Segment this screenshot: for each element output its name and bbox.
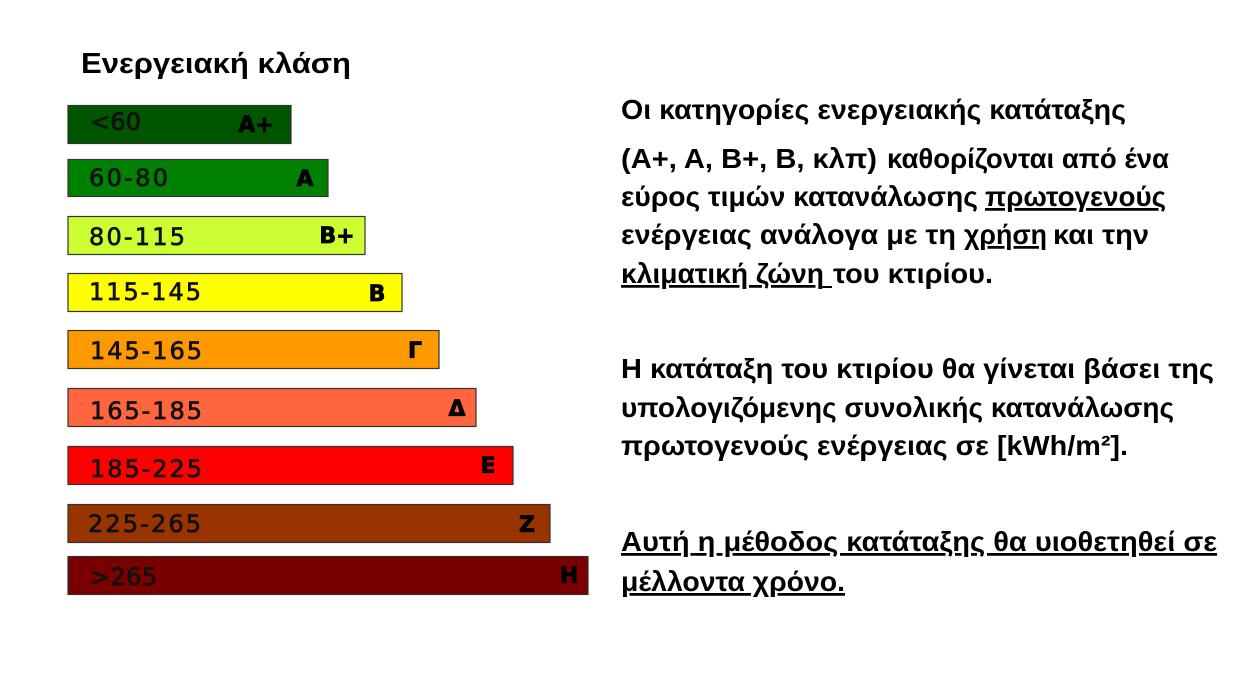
- bar: A: A: [296, 167, 314, 192]
- text block: classification categories: [621, 94, 1169, 289]
- text block: classification categories: καθορίζονται από ένα: [887, 143, 1169, 174]
- text block: classification categories: πρωτογενούς: [985, 181, 1166, 212]
- bar: B: B: [369, 282, 385, 307]
- text block: future adoption note: Αυτή η μέθοδος κατάταξης θα υιοθετηθεί σε: [621, 526, 1217, 557]
- text block: classification categories: χρήση: [964, 219, 1047, 250]
- bar: Η: [68, 556, 588, 594]
- bar: Η: >265: [90, 563, 157, 591]
- text block: classification categories: εύρος τιμών κατανάλωσης: [621, 181, 978, 212]
- bar: Ζ: [68, 504, 550, 542]
- bar: Η: Η: [560, 564, 578, 589]
- bar: A: 60-80: [89, 164, 168, 192]
- text block: building classification: πρωτογενούς ενέργειας σε [kWh/m²].: [621, 430, 1128, 461]
- bar: B+: 80-115: [89, 223, 185, 251]
- text block: classification categories: (Α+, Α, Β+, Β, κλπ): [621, 143, 877, 174]
- text block: classification categories: και την: [1053, 219, 1149, 250]
- bar: Δ: 165-185: [90, 397, 202, 425]
- bar: Δ: [68, 388, 476, 426]
- text block: building classification: Η κατάταξη του κτιρίου θα γίνεται βάσει της: [621, 353, 1214, 384]
- text block: future adoption note: μέλλοντα χρόνο.: [621, 566, 845, 597]
- bar: Γ: Γ: [408, 339, 422, 364]
- text block: classification categories: ενέργειας ανάλογα με τη: [621, 219, 956, 250]
- text block: building classification: [621, 353, 1214, 461]
- title: Ενεργειακή κλάση: [81, 48, 351, 80]
- text block: classification categories: του κτιρίου.: [833, 258, 993, 289]
- bar: B+: B+: [319, 224, 355, 249]
- bar: Ε: Ε: [480, 454, 496, 479]
- bar: Δ: Δ: [448, 397, 466, 422]
- bar: Γ: 145-165: [90, 337, 202, 365]
- bar: A+: [68, 106, 291, 144]
- text block: building classification: υπολογιζόμενης συνολικής κατανάλωσης: [621, 392, 1174, 423]
- bar: Ε: [68, 446, 513, 484]
- bar: B: 115-145: [89, 278, 201, 306]
- bar: A: [68, 160, 328, 196]
- bar: Γ: [68, 330, 439, 368]
- energy class bar chart: [68, 106, 588, 594]
- bar: Ζ: 225-265: [88, 510, 201, 538]
- bar: B+: [68, 216, 365, 254]
- bar: Ζ: Ζ: [519, 513, 535, 538]
- text block: classification categories: κλιματική ζώνη: [621, 258, 824, 289]
- text block: future adoption note: [621, 526, 1217, 597]
- bar: B: [68, 274, 402, 312]
- bar: A+: A+: [238, 113, 274, 138]
- bar: A+: <60: [90, 108, 141, 136]
- text block: classification categories: Οι κατηγορίες ενεργειακής κατάταξης: [621, 94, 1126, 125]
- bar: Ε: 185-225: [90, 455, 202, 483]
